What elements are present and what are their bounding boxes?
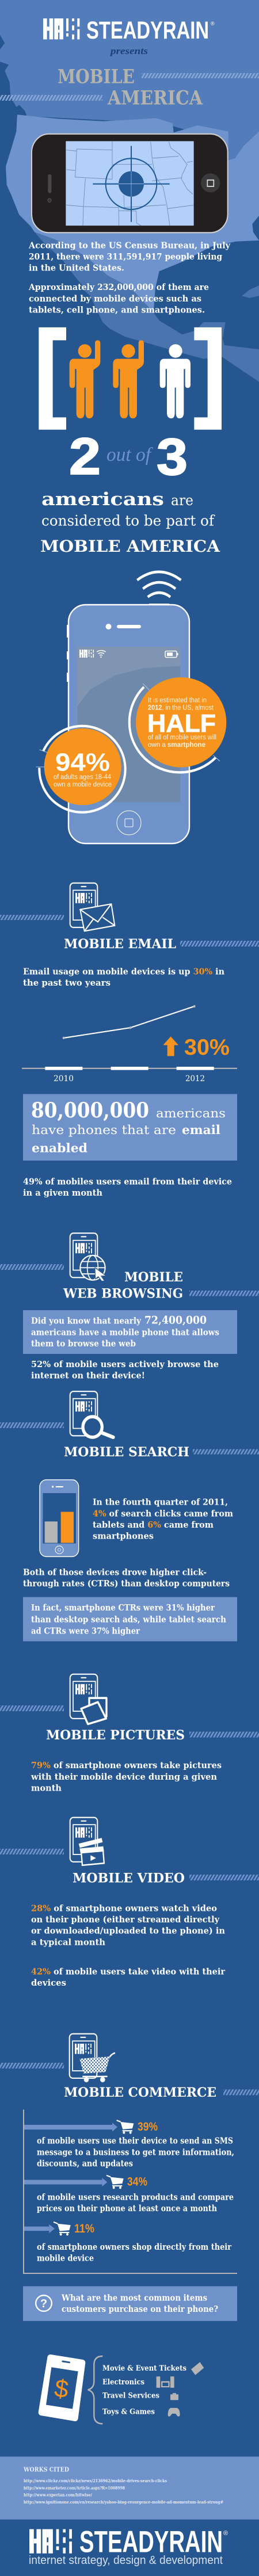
americans are considered — [40, 489, 220, 556]
brace and purchase items: Movie & Event Tickets — [102, 2364, 186, 2373]
panel: 80,000,000 americans: americans — [156, 1106, 226, 1120]
icon: shopping cart — [79, 2053, 115, 2082]
line chart: email usage 2010 to 2012: 2010 — [54, 1074, 74, 1083]
section: mobile web browsing heading and icon: WEB BROWSING — [63, 1287, 183, 1302]
icon: envelope — [80, 904, 115, 931]
icon: stereo — [157, 2376, 174, 2388]
logo: steadyrain footer — [29, 2525, 228, 2567]
panel: CTR comparison: ad CTRs were 37% higher — [31, 1625, 140, 1636]
section: mobile web browsing heading and icon — [0, 1233, 259, 1302]
callout: half will own a smartphone: HALF — [147, 709, 216, 738]
panel: works cited: WORKS CITED — [23, 2466, 69, 2474]
line chart: email usage 2010 to 2012: 30% — [184, 1035, 230, 1060]
panel: 80,000,000 americans: enabled — [32, 1140, 87, 1155]
logo: steadyrain header — [43, 17, 215, 44]
search clicks text: 4% of search clicks came from — [93, 1508, 233, 1518]
email usage text: the past two years — [23, 978, 111, 988]
americans are considered: considered to be part of — [41, 513, 215, 529]
icon: magnifying glass — [83, 1417, 113, 1437]
logo: steadyrain footer: ® — [223, 2530, 228, 2537]
americans are considered: are — [171, 492, 193, 509]
chart: commerce frame and arrows: of smartphone owners shop directly from their — [37, 2242, 232, 2252]
panel: 80,000,000 americans — [23, 1094, 237, 1161]
americans are considered: americans — [41, 489, 164, 510]
web browsing stat: internet on their device! — [31, 1371, 145, 1381]
title: mobile america — [0, 66, 259, 109]
click-through text — [23, 1567, 230, 1589]
email usage text: Email usage on mobile devices is up 30% in — [23, 967, 224, 977]
search clicks text — [93, 1497, 233, 1541]
section: mobile web browsing heading and icon: MOBILE — [124, 1270, 183, 1285]
panel: CTR comparison: In fact, smartphone CTRs were 31% higher — [31, 1602, 215, 1613]
title: mobile america: MOBILE — [58, 66, 135, 89]
icon: wifi arcs — [137, 572, 181, 597]
chart: commerce frame and arrows: 34% — [127, 2176, 147, 2189]
callout: 94% of adults: own a mobile device — [54, 781, 112, 788]
intro text: Approximately 232,000,000 of them are — [28, 282, 209, 292]
brace and purchase items — [88, 2356, 204, 2424]
logo: steadyrain footer: internet strategy, design & development — [29, 2554, 223, 2567]
search clicks text: smartphones — [93, 1531, 154, 1541]
panel: 72,400,000 americans: Did you know that nearly — [31, 1316, 142, 1326]
panel: works cited: http://www.ignitionone.com/en/research/yahoo-bing-resurgence-mobile-ad-momentum-lead-strong# — [24, 2499, 223, 2505]
icon: phone with dollar sign: $ — [53, 2375, 70, 2403]
callout: 94% of adults: of adults ages 18-44 — [54, 774, 112, 781]
panel: works cited: http://www.clickz.com/clickz/news/2136962/mobile-drives-search-clicks — [24, 2478, 167, 2483]
section: mobile commerce heading and icon — [0, 2034, 259, 2100]
web browsing stat: 52% of mobile users actively browse the — [31, 1359, 219, 1369]
search clicks text: tablets and 6% came from — [93, 1520, 214, 1530]
map background — [0, 0, 259, 382]
icon: clapperboard — [79, 1838, 104, 1865]
section: mobile video heading and icon — [0, 1818, 259, 1886]
callout: 94% of adults: 94% — [55, 749, 110, 777]
brace and purchase items: Travel Services — [102, 2392, 159, 2401]
mobile pictures stat: 79% of smartphone owners take pictures — [31, 1760, 222, 1770]
arrow: 34% — [24, 2176, 124, 2189]
mobile video stats — [31, 1903, 226, 1988]
phone with map crosshair — [32, 134, 228, 232]
panel: question: customers purchase on their phone? — [62, 2304, 218, 2314]
email monthly stat: in a given month — [23, 1188, 102, 1198]
panel: question — [23, 2286, 237, 2321]
americans are considered: MOBILE AMERICA — [40, 537, 220, 556]
presents: presents — [109, 45, 148, 56]
brackets with people pictogram — [39, 327, 222, 430]
panel: works cited: http://www.emarketer.com/Article.aspx?R=1008998 — [24, 2485, 125, 2490]
mobile video stats: a typical month — [31, 1937, 105, 1948]
panel: 72,400,000 americans: 72,400,000 — [144, 1314, 207, 1327]
section: mobile video heading and icon: MOBILE VIDEO — [73, 1871, 185, 1886]
intro text: According to the US Census Bureau, in July — [28, 240, 231, 250]
callout: half will own a smartphone — [130, 677, 226, 772]
email monthly stat: 49% of mobiles users email from their device — [23, 1177, 232, 1187]
icon: ticket — [191, 2362, 204, 2375]
callout: 94% of adults — [36, 726, 125, 812]
panel: works cited — [0, 2457, 259, 2520]
intro text: 2011, there were 311,591,917 people living — [29, 251, 222, 262]
mobile video stats: devices — [31, 1978, 66, 1988]
title: mobile america: AMERICA — [107, 86, 203, 109]
chart: commerce frame and arrows — [23, 2109, 237, 2274]
callout: half will own a smartphone: It is estimated that in — [148, 697, 207, 704]
chart: commerce frame and arrows: discounts, and updates — [37, 2158, 133, 2169]
panel: 72,400,000 americans: americans have a mobile phone that allows — [31, 1327, 219, 1338]
panel: CTR comparison — [23, 1597, 237, 1641]
icon: phone with dollar sign — [41, 2357, 82, 2418]
mobile pictures stat — [31, 1760, 222, 1793]
arrow: 11% — [24, 2222, 71, 2235]
chart: commerce frame and arrows: 39% — [138, 2120, 158, 2134]
panel: 80,000,000 americans: 80,000,000 — [31, 1098, 149, 1123]
callout: half will own a smartphone: of all of mobile users will — [148, 734, 216, 741]
icon: phone with bar chart — [40, 1480, 79, 1556]
icon: orange person 2 — [113, 340, 144, 418]
icon: white person — [160, 344, 191, 418]
section: mobile commerce heading and icon: MOBILE COMMERCE — [64, 2085, 216, 2100]
panel: works cited: http://www.experian.com/hitwise/ — [24, 2492, 92, 2497]
section: mobile search heading and icon: MOBILE SEARCH — [64, 1445, 189, 1460]
panel: 72,400,000 americans — [23, 1310, 237, 1354]
line chart: email usage 2010 to 2012 — [22, 1005, 237, 1083]
icon: globe and cursor — [80, 1255, 106, 1281]
panel: question: What are the most common items — [61, 2292, 207, 2303]
intro text: in the United States. — [29, 263, 124, 273]
icon: gamepad — [168, 2408, 180, 2417]
brace and purchase items: Electronics — [102, 2378, 144, 2387]
icon: briefcase — [170, 2393, 178, 2400]
2 out of 3: out of — [106, 444, 153, 465]
email usage text — [23, 967, 224, 988]
section: mobile search heading and icon — [0, 1391, 259, 1460]
arrow: 39% — [24, 2120, 134, 2134]
2 out of 3: 2 — [69, 428, 101, 486]
mobile pictures stat: with their mobile device during a given — [31, 1772, 217, 1782]
mobile video stats: or downloaded/uploaded to the phone) in — [31, 1926, 225, 1936]
intro text — [28, 240, 231, 315]
big smartphone — [67, 604, 189, 844]
mobile video stats: 28% of smartphone owners watch video — [31, 1903, 217, 1913]
brace and purchase items: Toys & Games — [102, 2408, 155, 2417]
panel: 72,400,000 americans: them to browse the web — [31, 1338, 136, 1349]
icon: photos — [81, 1698, 106, 1724]
icon: orange person 1 — [70, 340, 100, 418]
section: mobile pictures heading and icon — [0, 1674, 259, 1743]
2 out of 3 — [69, 428, 188, 486]
section: mobile email heading and icon — [0, 883, 259, 952]
email monthly stat — [23, 1177, 232, 1198]
section: mobile pictures heading and icon: MOBILE PICTURES — [46, 1728, 185, 1743]
panel: CTR comparison: than desktop search ads, while tablet search — [31, 1615, 226, 1625]
2 out of 3: 3 — [157, 429, 188, 486]
callout: half will own a smartphone: own a smartphone — [148, 742, 205, 749]
search clicks text: In the fourth quarter of 2011, — [93, 1497, 228, 1508]
web browsing stat — [31, 1359, 219, 1381]
logo: steadyrain header: ® — [211, 21, 215, 26]
click-through text: Both of those devices drove higher click- — [23, 1567, 207, 1578]
mobile video stats: 42% of mobile users take video with their — [31, 1966, 226, 1976]
chart: commerce frame and arrows: 11% — [74, 2222, 94, 2235]
line chart: email usage 2010 to 2012: 2012 — [185, 1074, 205, 1083]
chart: commerce frame and arrows: prices on their phone at least once a month — [37, 2203, 217, 2214]
chart: commerce frame and arrows: mobile device — [37, 2253, 94, 2264]
callout: half will own a smartphone: 2012, in the US, almost — [148, 705, 214, 712]
click-through text: through rates (CTRs) than desktop computers — [23, 1578, 230, 1589]
intro text: tablets, cell phone, and smartphones. — [29, 305, 205, 315]
mobile pictures stat: month — [31, 1783, 62, 1793]
logo: steadyrain header: STEADYRAIN — [86, 17, 209, 44]
panel: question: ? — [40, 2298, 47, 2310]
section: mobile email heading and icon: MOBILE EMAIL — [64, 937, 176, 952]
panel: 80,000,000 americans: email — [182, 1123, 220, 1137]
mobile video stats: on their phone (either streamed directly — [31, 1914, 220, 1925]
panel: 80,000,000 americans: have phones that are — [32, 1123, 176, 1137]
intro text: connected by mobile devices such as — [29, 293, 201, 304]
